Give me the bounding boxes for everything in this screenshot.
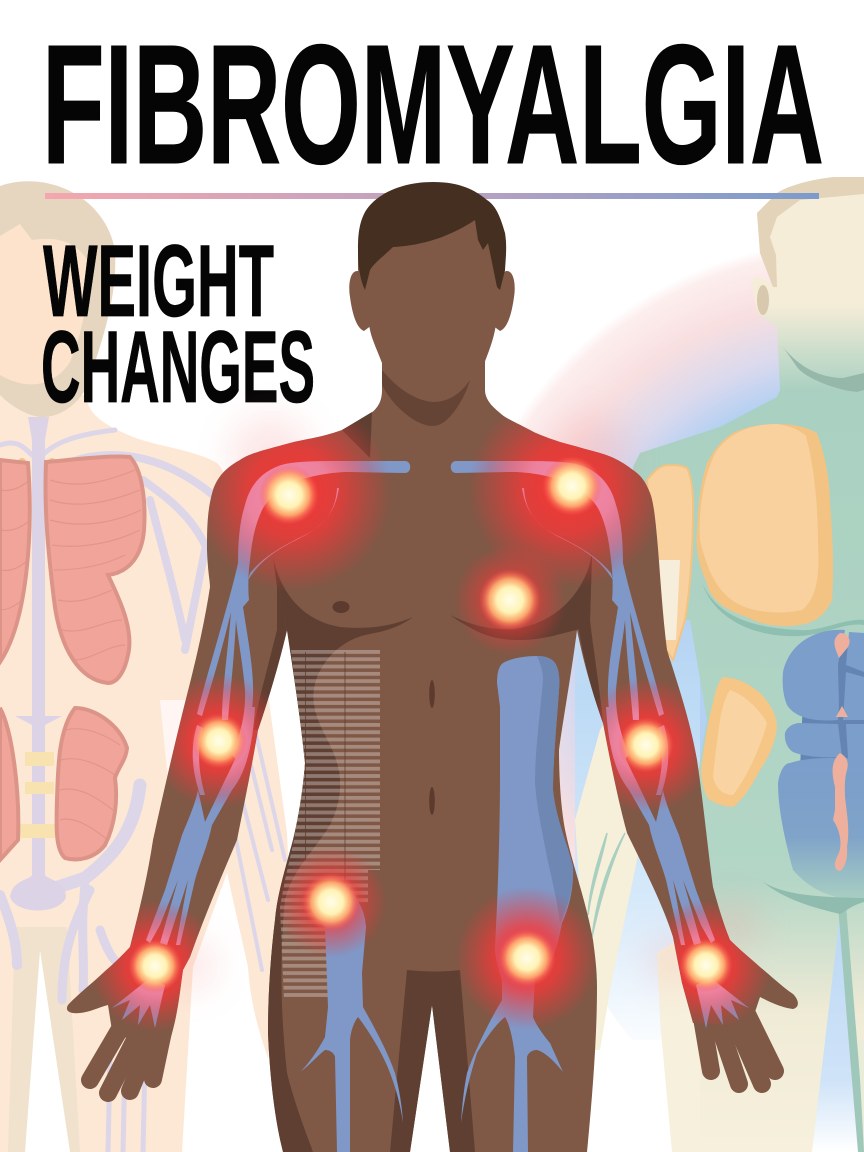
neck shadow (382, 370, 470, 426)
yellow organ large (696, 424, 833, 626)
subtitle: CHANGES (41, 310, 315, 424)
elbow pain left (191, 713, 247, 769)
inner arm shadow left (253, 557, 287, 730)
right leg gap (812, 913, 860, 1152)
navel marks (429, 680, 435, 815)
chest shadow right (450, 555, 592, 640)
yellow organ lower (701, 677, 777, 807)
right arm vessels (451, 461, 749, 1028)
fingers left (90, 1022, 165, 1093)
pink vessels over glow (112, 461, 749, 1028)
right figure chin shadow (783, 347, 864, 392)
intestine top lobes (783, 630, 845, 720)
yellow organ lower highlight (713, 690, 767, 795)
kidney left (0, 708, 18, 860)
crotch shadow (390, 970, 475, 1152)
subtitle: WEIGHT (43, 224, 274, 338)
right figure leg (657, 900, 842, 1152)
body silhouette (67, 360, 798, 1152)
right far leg (858, 1040, 864, 1152)
right figure ear detail (757, 285, 769, 315)
kidney right (57, 708, 127, 859)
white gap beside left figure torso (160, 700, 188, 780)
yellow organ left (647, 465, 693, 660)
belly crease (763, 882, 864, 914)
left figure inner leg shading (8, 927, 80, 1152)
left thigh vessel (300, 882, 403, 1152)
elbow pain right (618, 717, 674, 773)
trapezius shadow (342, 412, 372, 458)
lung right (45, 457, 144, 683)
faded left figure: anatomy (0, 181, 290, 1152)
gradient rule (45, 193, 819, 199)
intestine backing (800, 640, 864, 770)
intestine lower lobe (778, 758, 864, 900)
intestine middle lobes (785, 723, 842, 757)
right figure hair (757, 177, 864, 287)
abdomen and right thigh vessel (461, 656, 573, 1152)
torso side and chest shadow left (268, 557, 413, 1152)
fingers right (701, 1012, 775, 1084)
wrist pain left (128, 939, 182, 993)
organ shadow (702, 583, 864, 636)
right figure grass strokes (588, 833, 625, 937)
central figure (67, 182, 798, 1152)
right leg inner line (838, 905, 864, 1152)
shoulder pain left (259, 465, 319, 525)
yellow organ large highlight (700, 424, 818, 612)
shoulder pain right (542, 456, 602, 516)
left arm vessels (112, 461, 410, 1028)
rainbow arc behind right figure (450, 240, 864, 1152)
pain point glows (89, 388, 772, 1032)
wrist pain right (679, 938, 733, 992)
inner arm shadow right (577, 553, 603, 723)
red halos clipped to body (89, 388, 772, 1032)
left figure spine (10, 417, 66, 910)
lung and kidney fibres (0, 470, 141, 840)
cream patch on organ (655, 560, 680, 640)
hip pain left (302, 873, 360, 931)
subtitle (41, 224, 315, 424)
right figure head and torso (633, 177, 864, 1152)
blue intestine (778, 630, 864, 900)
nipple (332, 601, 350, 613)
abdomen vessel shading (535, 656, 573, 923)
chest pain (479, 569, 541, 631)
left figure face (0, 224, 88, 384)
hip pain right (498, 929, 556, 987)
right figure arm (575, 620, 673, 1050)
lung left (0, 460, 30, 662)
hair (358, 182, 506, 290)
faded right figure: organs (575, 177, 864, 1152)
left figure head and hair (0, 181, 115, 417)
face and neck (358, 212, 505, 395)
intestine pink details (833, 633, 850, 871)
outer pink halos (164, 415, 758, 991)
left figure veins (0, 430, 285, 1152)
left figure body (0, 395, 290, 1152)
ears (349, 271, 515, 331)
hatched scale block (280, 650, 380, 1000)
